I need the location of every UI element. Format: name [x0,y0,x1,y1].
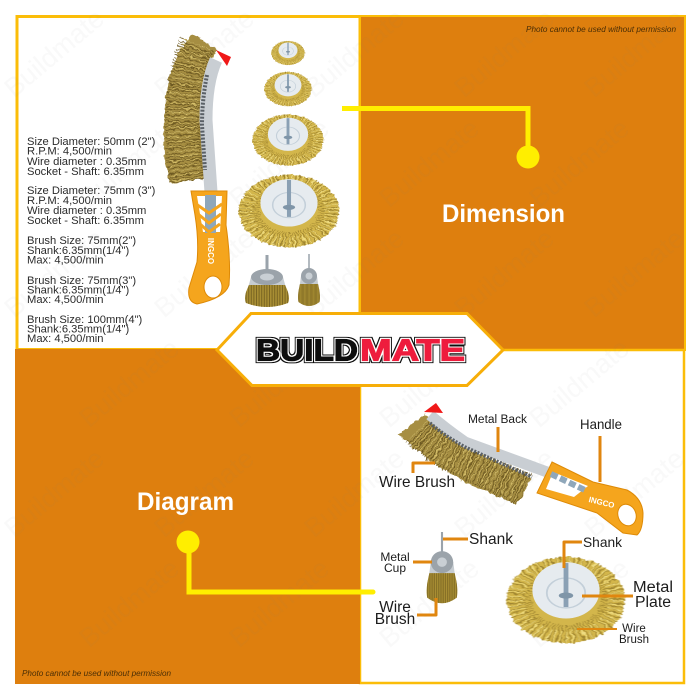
watermark: Buildmate [374,333,485,433]
watermark: Buildmate [74,333,185,433]
callout: Wire Brush on hand brush [379,463,455,491]
panel: diagram heading [15,349,360,684]
diagram: cup brush [425,532,459,603]
callout: Wire Brush on cup: Wire [379,599,411,616]
watermark: Buildmate [149,3,260,103]
logo: BUILD: BUILD [256,332,358,368]
watermark: Buildmate [0,3,110,103]
note: photo permission top: Photo cannot be used without permission [526,25,677,34]
panel: product overview [17,16,360,350]
specification text: Socket - Shaft: 6.35mm [27,166,144,178]
left divider of parts diagram [350,350,360,684]
product: wheel brush 75mm [264,72,312,106]
panel: parts diagram [360,350,684,683]
callout: Metal Plate: Plate [635,594,671,611]
callout: Wire Brush on wheel [577,623,649,646]
specification text: Size Diameter: 50mm (2") [27,136,156,148]
specification text: R.P.M: 4,500/min [27,195,112,207]
logo badge [217,314,503,386]
callout: Metal Back [468,414,527,452]
callout: Handle [580,416,622,482]
diagram: hand wire brush: INGCO [588,495,615,510]
panel: dimension [360,16,685,350]
product: cup brush small [297,254,321,306]
watermark: Buildmate [224,113,335,213]
specification text: R.P.M: 4,500/min [27,146,112,158]
note: photo permission bottom: Photo cannot be used without permission [22,669,172,678]
callout: Wire Brush on wheel: Wire [622,623,646,635]
specification text: Brush Size: 75mm(2") [27,235,136,247]
heading: Diagram: Diagram [137,488,234,516]
callout: Wire Brush on hand brush: Wire Brush [379,474,455,491]
specification text: Shank:6.35mm(1/4") [27,245,129,257]
product: wheel brush 50mm [271,41,305,65]
callout: Handle: Handle [580,416,622,432]
heading: Dimension: Dimension [442,200,565,228]
watermark: Buildmate [524,333,635,433]
product: cup brush large [243,255,291,307]
specification text: Wire diameter : 0.35mm [27,156,146,168]
callout: Metal Back: Metal Back [468,414,527,426]
watermark: Buildmate [374,553,485,653]
specification text: Shank:6.35mm(1/4") [27,284,129,296]
connector: dimension [342,108,540,168]
callout: Wire Brush on wheel: Brush [619,634,649,646]
watermark: Buildmate [299,3,410,103]
callout: Metal Cup: Cup [384,561,406,575]
logo: MATE: MATE [360,332,465,368]
watermark: Buildmate [149,223,260,323]
watermark: Buildmate [0,223,110,323]
watermark: Buildmate [449,3,560,103]
callout: Metal Cup [380,550,432,575]
specification text: Brush Size: 75mm(3") [27,275,136,287]
watermark: Buildmate [0,443,110,543]
product: hand wire brush: INGCO [206,238,215,264]
watermark: Buildmate [579,3,690,103]
watermark: Buildmate [579,223,690,323]
specification text: Max: 4,500/min [27,254,103,266]
specification text: Socket - Shaft: 6.35mm [27,215,144,227]
watermark: Buildmate [449,223,560,323]
specification text: Max: 4,500/min [27,333,103,345]
callout: Shank on cup [443,531,514,548]
specification text: Size Diameter: 75mm (3") [27,185,156,197]
callout: Wire Brush on cup [375,598,436,628]
product: hand wire brush [164,34,231,304]
watermark: Buildmate [299,443,410,543]
watermark: Buildmate [224,333,335,433]
watermark: Buildmate [74,113,185,213]
callout: Shank on wheel [564,534,623,568]
callout: Shank on cup: Shank [469,531,514,548]
watermark: Buildmate [74,553,185,653]
callout: Shank on wheel: Shank [583,534,623,550]
specification text: Brush Size: 100mm(4") [27,314,143,326]
watermark: Buildmate [579,443,690,543]
product: wheel brush 100mm [253,115,323,165]
diagram: wheel brush [507,557,625,643]
callout: Metal Plate [582,579,673,611]
specification text: Max: 4,500/min [27,294,103,306]
specification text: Shank:6.35mm(1/4") [27,324,129,336]
watermark: Buildmate [224,553,335,653]
watermark: Buildmate [374,113,485,213]
callout: Wire Brush on cup: Brush [375,611,415,628]
watermark: Buildmate [524,553,635,653]
connector: diagram [176,530,373,592]
watermark: Buildmate [149,443,260,543]
callout: Metal Cup: Metal [380,550,410,564]
specification text [27,136,156,345]
watermark: Buildmate [524,113,635,213]
product: wheel brush large [239,175,339,247]
diagram: hand wire brush [398,403,643,535]
callout: Metal Plate: Metal [633,579,673,596]
watermark: Buildmate [299,223,410,323]
specification text: Wire diameter : 0.35mm [27,205,146,217]
watermark: Buildmate [449,443,560,543]
